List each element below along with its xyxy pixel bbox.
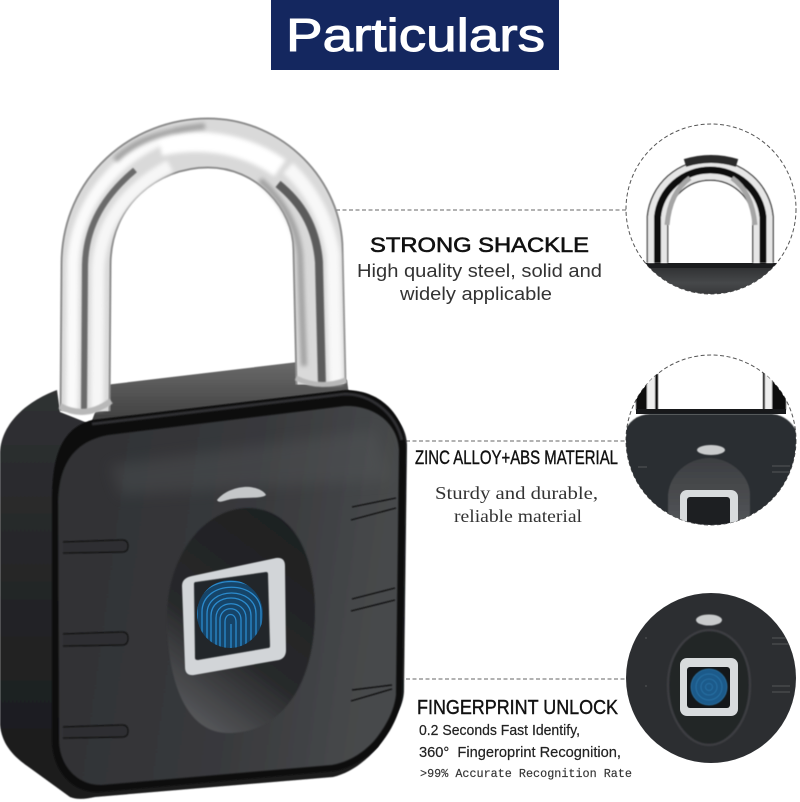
mini slots	[638, 466, 790, 472]
rim sheen	[92, 394, 402, 440]
padlock main illustration	[0, 126, 407, 799]
title banner	[271, 0, 559, 70]
sensor pad	[194, 572, 270, 660]
body top surface	[90, 362, 349, 426]
feature text: zinc alloy material: ZINC ALLOY+ABS MATERIAL	[415, 448, 618, 469]
fingerprint recess	[167, 508, 315, 733]
feature text: strong shackle: High quality steel, solid and	[357, 261, 602, 281]
zoom slots	[645, 638, 790, 692]
sensor frame	[182, 558, 286, 675]
mini LED	[697, 445, 725, 455]
detail circle: shackle	[620, 124, 800, 303]
left grip slots	[63, 540, 128, 738]
body front face	[58, 406, 399, 785]
shackle collars	[60, 401, 111, 412]
feature text: fingerprint unlock	[417, 697, 632, 781]
detail circle: fingerprint	[626, 593, 796, 763]
fingerprint	[196, 580, 265, 652]
mini recess	[668, 458, 750, 530]
feature text: fingerprint unlock: >99% Accurate Recognition Rate	[420, 767, 632, 781]
feature text: strong shackle: widely applicable	[399, 284, 552, 304]
zoom recess	[668, 630, 750, 745]
feature text: fingerprint unlock: 360° Fingeroprint Recognition,	[419, 744, 621, 761]
steel shackle	[60, 126, 346, 412]
feature text: zinc alloy material: Sturdy and durable,	[435, 483, 598, 503]
body front rim	[52, 390, 406, 792]
feature text: zinc alloy material	[415, 448, 618, 526]
detail circle: body material	[626, 354, 796, 526]
feature text: zinc alloy material: reliable material	[454, 506, 582, 526]
zoom sensor frame	[680, 658, 738, 716]
title banner: Particulars	[286, 9, 545, 61]
mini sensor	[680, 490, 738, 525]
feature text: strong shackle: STRONG SHACKLE	[370, 234, 589, 257]
callout connector: shackle	[336, 209, 627, 211]
shackle stubs	[636, 370, 786, 410]
callout connector: material	[406, 440, 627, 442]
right grip slots	[351, 498, 396, 701]
feature text: fingerprint unlock: FINGERPRINT UNLOCK	[417, 697, 619, 719]
zoom fingerprint	[691, 669, 727, 705]
feature text: strong shackle	[357, 234, 602, 304]
feature text: fingerprint unlock: 0.2 Seconds Fast Identify,	[419, 722, 580, 739]
body side shell	[0, 390, 407, 799]
zoom LED	[696, 614, 722, 626]
callout connector: fingerprint	[406, 678, 627, 680]
face highlight	[110, 430, 392, 495]
status LED	[217, 487, 266, 502]
